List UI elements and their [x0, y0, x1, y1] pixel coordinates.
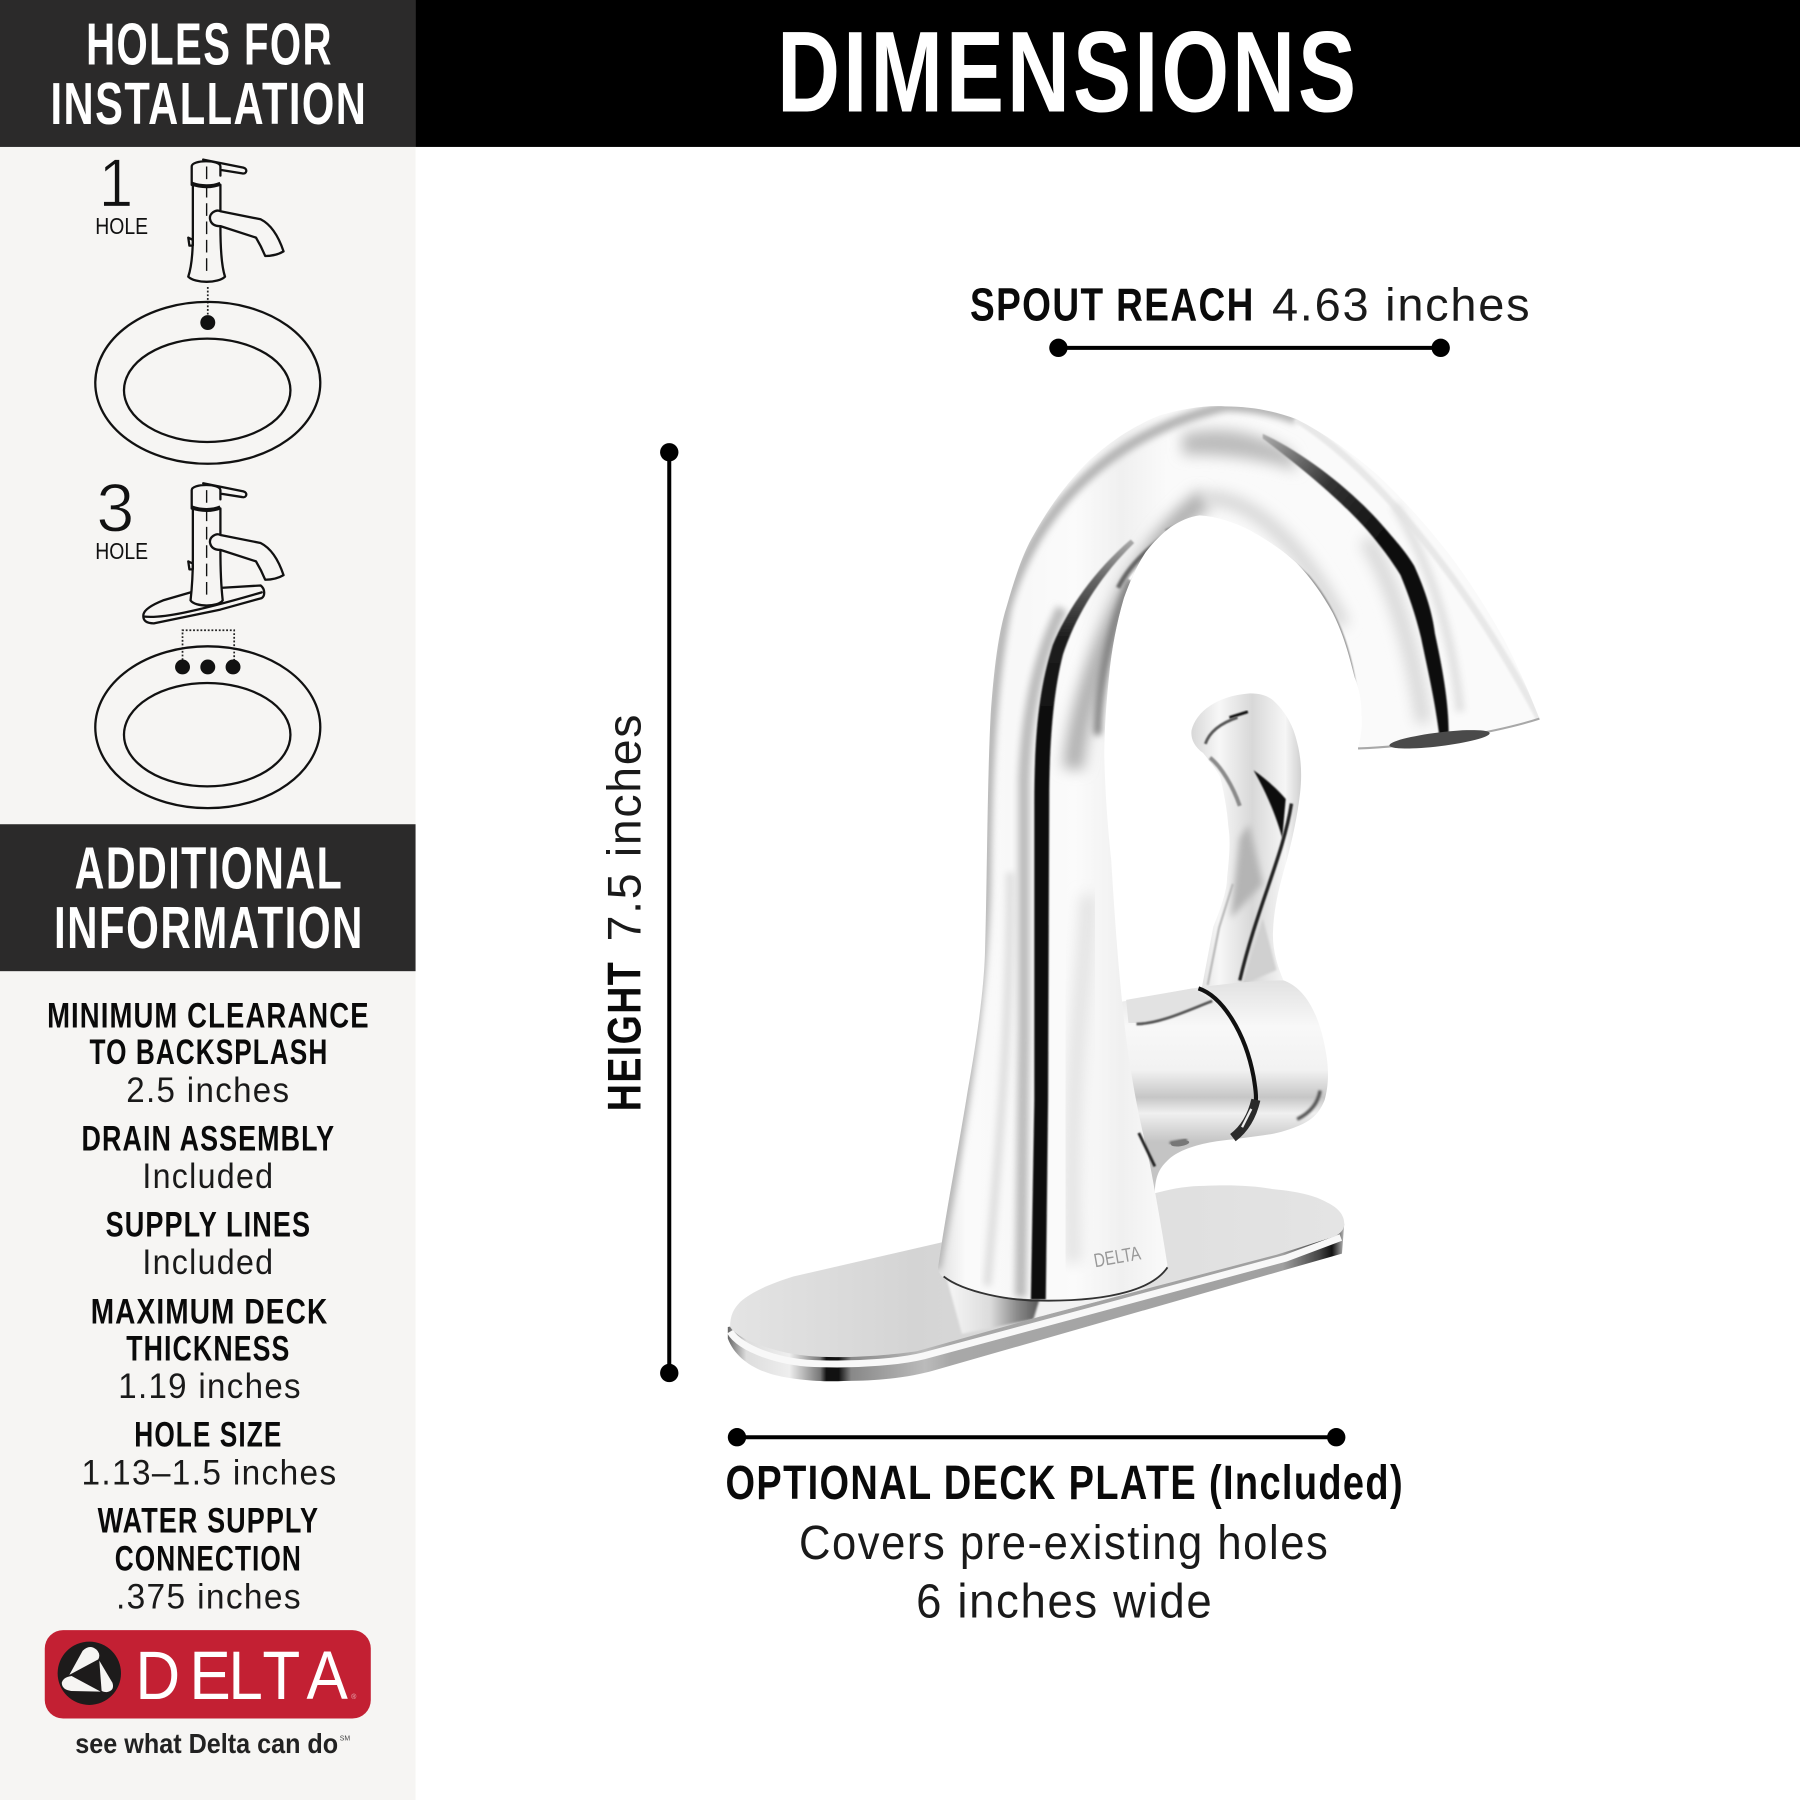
dimension: optional deck plate: Covers pre-existing holes: [799, 1516, 1329, 1570]
spec: minimum clearance: MINIMUM CLEARANCE: [47, 995, 370, 1035]
lever handle: [1191, 693, 1301, 990]
spec: drain assembly: DRAIN ASSEMBLY: [82, 1118, 335, 1158]
spec: minimum clearance: 2.5 inches: [126, 1070, 290, 1110]
dimension: height: HEIGHT: [598, 961, 651, 1111]
lever ring: [1198, 988, 1256, 1108]
spec: minimum clearance: [47, 995, 370, 1110]
header: additional information: ADDITIONAL: [75, 835, 343, 902]
dimension: optional deck plate: 6 inches wide: [916, 1574, 1213, 1628]
spec: hole size: 1.13–1.5 inches: [82, 1452, 338, 1492]
spec: maximum deck thickness: [91, 1292, 328, 1406]
tagline: see what Delta can do: [75, 1728, 338, 1759]
header: holes for installation: INSTALLATION: [51, 70, 367, 137]
title: dimensions: [416, 0, 1800, 147]
dimension: spout reach: [970, 278, 1531, 357]
spec: water supply connection: WATER SUPPLY: [98, 1501, 319, 1541]
header: additional information: INFORMATION: [54, 894, 364, 961]
spec: supply lines: [106, 1204, 311, 1282]
dimension: spout reach: SPOUT REACH: [970, 278, 1255, 330]
icon: single-hole faucet: [188, 160, 284, 282]
label: 1 hole: 1: [99, 145, 133, 222]
label: 1 hole: [95, 145, 148, 239]
spout mouth and aerator: [1358, 719, 1539, 752]
spec: minimum clearance: TO BACKSPLASH: [90, 1032, 328, 1072]
header: holes for installation: [0, 0, 416, 147]
diagram: 3 hole installation: [95, 470, 320, 808]
dimension: spout reach: 4.63 inches: [1272, 278, 1531, 330]
spec: water supply connection: .375 inches: [116, 1576, 302, 1616]
spec: drain assembly: Included: [142, 1156, 274, 1196]
label: 3 hole: 3: [96, 470, 134, 547]
spec: hole size: HOLE SIZE: [134, 1414, 282, 1454]
logo: delta: [45, 1630, 371, 1718]
label: 1 hole: HOLE: [95, 213, 148, 239]
icon: sink with three holes: [95, 630, 320, 808]
deck plate: [728, 1185, 1344, 1381]
spec: hole size: [82, 1414, 338, 1492]
icon: sink with one hole: [95, 287, 320, 464]
neck and spout: [936, 406, 1539, 1301]
label: 3 hole: [95, 470, 148, 564]
spec: drain assembly: [82, 1118, 335, 1196]
spec: water supply connection: CONNECTION: [115, 1538, 302, 1578]
dimension: height: [598, 443, 678, 1382]
logo: delta: ®: [351, 1693, 356, 1701]
spec: maximum deck thickness: MAXIMUM DECK: [91, 1292, 328, 1332]
panel: left sidebar background: [0, 0, 416, 1800]
lever body: [1119, 980, 1328, 1194]
spec: maximum deck thickness: 1.19 inches: [118, 1366, 302, 1406]
faucet product image: [728, 406, 1539, 1381]
tagline: SM: [340, 1735, 350, 1742]
spec: supply lines: Included: [142, 1242, 274, 1282]
icon: faucet with deck plate: [143, 483, 284, 623]
spec: water supply connection: [98, 1501, 319, 1616]
icon: delta triangle mark: [58, 1642, 121, 1705]
title: dimensions: DIMENSIONS: [777, 8, 1359, 136]
faucet brand mark: DELTA: [1092, 1242, 1142, 1272]
dimension: height: 7.5 inches: [598, 713, 651, 941]
header: holes for installation: HOLES FOR: [86, 10, 333, 77]
dimension: optional deck plate: OPTIONAL DECK PLATE (Included): [726, 1456, 1404, 1510]
header: additional information: [0, 824, 416, 971]
spec: maximum deck thickness: THICKNESS: [126, 1328, 290, 1368]
dimension: optional deck plate: [726, 1428, 1404, 1628]
label: 3 hole: HOLE: [95, 538, 148, 564]
logo: delta: DELTA: [135, 1637, 348, 1714]
diagram: 1 hole installation: [95, 145, 320, 464]
spec: supply lines: SUPPLY LINES: [106, 1204, 311, 1244]
